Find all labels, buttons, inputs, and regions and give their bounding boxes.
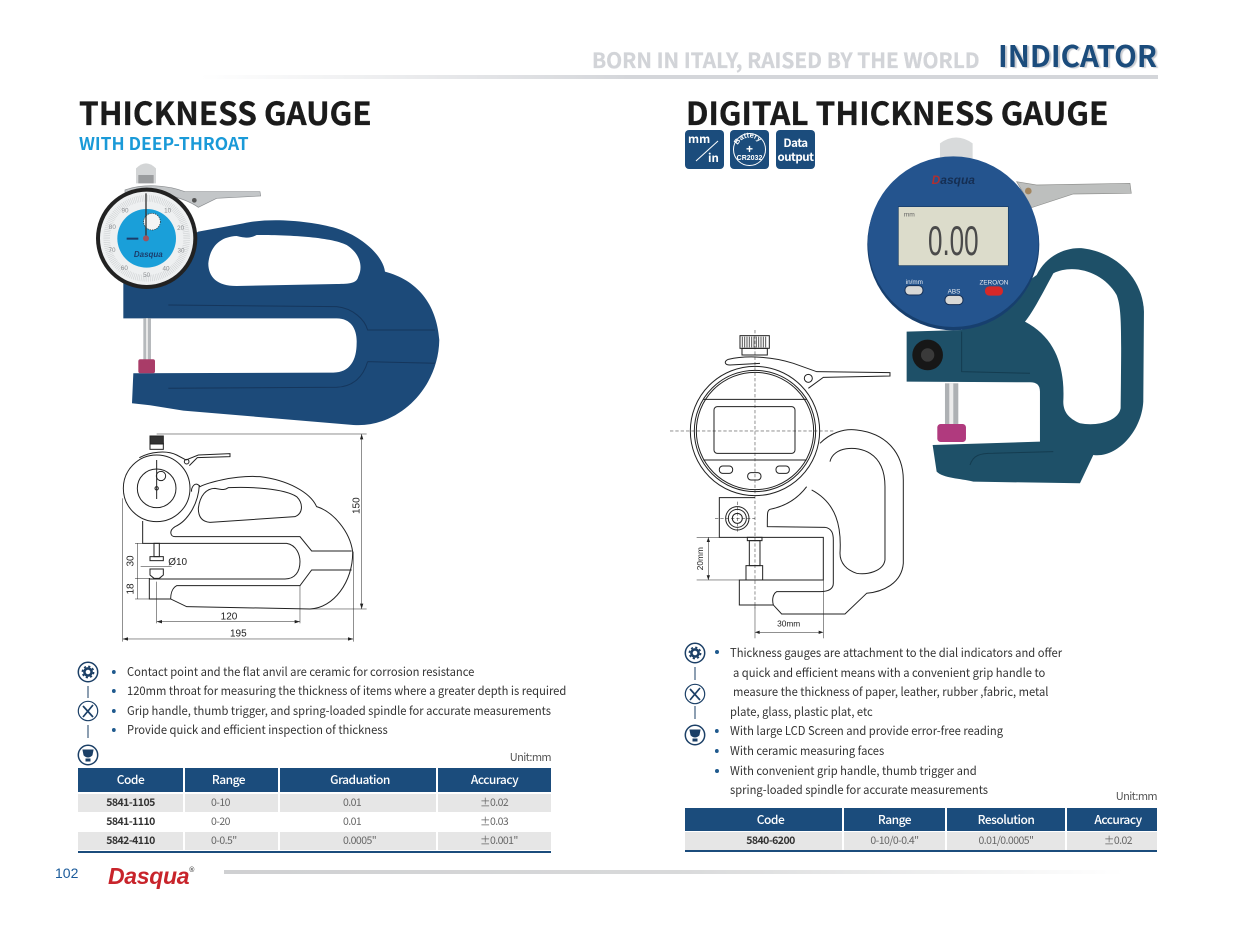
- dial: [96, 188, 197, 289]
- spec table: right: 0.01/0.0005": [979, 833, 1033, 848]
- spec table: left: [78, 768, 551, 853]
- brand logo: Dasqua®: [108, 863, 194, 889]
- spec table: right: Resolution: [978, 811, 1034, 828]
- page number: 102: [55, 865, 78, 881]
- thumb lever: [125, 186, 261, 207]
- dimension labels: 20mm: [695, 547, 705, 570]
- brand: Dasqua: [932, 173, 975, 187]
- spec table: left: 0.0005": [343, 833, 376, 848]
- dimension labels: 18: [126, 583, 137, 595]
- photo: dial deep-throat thickness gauge: 60: [121, 265, 128, 272]
- spec table: left: Accuracy: [471, 771, 518, 788]
- spec table: left: ±0.02: [480, 795, 508, 810]
- spindle: [143, 318, 151, 360]
- thumb lever: [1017, 182, 1131, 208]
- dial brand: Dasqua: [134, 250, 163, 259]
- icon: gear: [78, 662, 98, 682]
- bullet 2: With large LCD Screen and provide error-free reading: [730, 722, 1003, 739]
- spec table: left: 0-0.5": [211, 833, 237, 848]
- subtitle: with deep-throat: WITH DEEP-THROAT: [79, 131, 249, 156]
- icon: tools: [685, 684, 705, 704]
- row 5842-4110: 5842-4110: [106, 833, 155, 848]
- bullet 1: Contact point and the flat anvil are ceramic for corrosion resistance: [127, 663, 474, 680]
- badge: data output: [776, 130, 815, 169]
- header slogan: BORN IN ITALY, RAISED BY THE WORLD: [592, 44, 980, 74]
- row 5841-1105: 5841-1105: [106, 795, 155, 810]
- photo: dial deep-throat thickness gauge: 30: [177, 248, 185, 255]
- photo: dial deep-throat thickness gauge: 80: [109, 224, 116, 231]
- dial buttons: [905, 286, 923, 295]
- bullet 4: Provide quick and efficient inspection of thickness: [127, 721, 388, 738]
- ceramic tip: [138, 359, 155, 373]
- spec table: left: Graduation: [330, 771, 390, 788]
- badge: mm/in: [685, 130, 724, 169]
- dial body: [867, 158, 1039, 330]
- bullet 1: Thickness gauges are attachment to the dial indicators and offer: [730, 644, 1062, 661]
- row 5840-6200: 5840-6200: [746, 833, 795, 848]
- spec table: right: 0-10/0-0.4": [870, 833, 919, 848]
- dimension labels: 30mm: [777, 619, 800, 629]
- photo: dial deep-throat thickness gauge: 10: [164, 207, 172, 214]
- row 5840-6200: [685, 832, 842, 850]
- footer rule: [224, 870, 1124, 874]
- badge: mm/in: in: [708, 150, 719, 166]
- clamp screw: [912, 340, 943, 370]
- badge: battery CR2032: Battery: [734, 132, 762, 145]
- icon: gear: [685, 643, 705, 663]
- icon column: right: [684, 642, 706, 746]
- photo: dial deep-throat thickness gauge: 40: [162, 266, 170, 273]
- header rule: [200, 75, 1158, 79]
- row 5842-4110: [78, 832, 183, 850]
- photo: digital thickness gauge: ZERO/ON: [980, 279, 1009, 286]
- photo: dial deep-throat thickness gauge: 90: [121, 207, 129, 214]
- unit label: right: Unit:mm: [1116, 788, 1157, 804]
- icon column: left: [78, 662, 98, 766]
- dimension labels: [695, 547, 800, 629]
- dimension labels: 30: [126, 555, 137, 567]
- badge: data output: output: [778, 149, 813, 165]
- photo: digital thickness gauge: ABS: [948, 288, 960, 295]
- bullet 2: 120mm throat for measuring the thickness of items where a greater depth is required: [127, 682, 566, 699]
- gauge frame: [907, 248, 1144, 483]
- spec table: right: [685, 808, 1157, 852]
- bullet 4: With convenient grip handle, thumb trigger and: [730, 762, 977, 779]
- header row: [78, 768, 183, 792]
- dimension labels: 150: [351, 497, 362, 514]
- top knob: [940, 137, 973, 158]
- photo: dial deep-throat thickness gauge: 50: [143, 272, 151, 279]
- spec table: left: 0-10: [211, 795, 230, 810]
- spec table: left: 0.01: [343, 795, 361, 810]
- bullet 1: [715, 644, 1062, 720]
- top knob: [136, 163, 156, 183]
- icon: tools: [78, 701, 98, 721]
- title: thickness gauge: THICKNESS GAUGE: [79, 89, 372, 135]
- dimension labels: 120: [221, 612, 238, 623]
- badge: mm/in: mm: [688, 131, 710, 147]
- row 5841-1110: 5841-1110: [106, 814, 155, 829]
- outline: [123, 455, 190, 522]
- photo: dial deep-throat thickness gauge: 70: [108, 247, 116, 254]
- badge: battery CR2032: CR2032: [737, 155, 762, 162]
- dimension labels: 195: [230, 628, 247, 639]
- spec table: right: Range: [878, 811, 911, 828]
- spindle: [945, 383, 958, 424]
- spec table: right: ±0.02: [1104, 833, 1132, 848]
- ceramic tip: [937, 424, 966, 442]
- bullet 1: measure the thickness of paper, leather, rubber ,fabric, metal: [733, 683, 1048, 700]
- feature badges: [685, 130, 815, 169]
- header row: Code: [117, 771, 144, 788]
- badge: data output: Data: [783, 135, 808, 151]
- header row: Code: [757, 811, 784, 828]
- badge: battery CR2032: +: [746, 142, 753, 156]
- spec table: left: 0-20: [211, 814, 230, 829]
- dimension labels: [126, 497, 362, 639]
- spec table: left: ±0.001": [480, 833, 518, 848]
- spec table: left: 0.01: [343, 814, 361, 829]
- bullet 3: Grip handle, thumb trigger, and spring-loaded spindle for accurate measurements: [127, 702, 551, 719]
- bullet 4: [715, 762, 988, 798]
- unit label: left: Unit:mm: [510, 749, 551, 765]
- lcd screen: [898, 207, 1008, 266]
- row 5841-1105: [78, 794, 183, 812]
- feature list: left: [112, 663, 566, 738]
- photo: digital thickness gauge: 0.00: [928, 218, 979, 264]
- bullet 1: a quick and efficient means with a convenient grip handle to: [733, 664, 1045, 681]
- spec table: left: Range: [212, 771, 245, 788]
- icon: trophy: [78, 745, 98, 765]
- outline: [690, 366, 820, 496]
- bullet 1: plate, glass, plastic plat, etc: [730, 703, 873, 720]
- bullet 4: spring-loaded spindle for accurate measurements: [730, 781, 988, 798]
- badge: battery CR2032: [730, 130, 769, 169]
- bullet 3: With ceramic measuring faces: [730, 742, 884, 759]
- spec table: right: Accuracy: [1094, 811, 1142, 828]
- gauge frame: [123, 220, 439, 425]
- dimension labels: Ø10: [168, 557, 188, 568]
- photo: digital thickness gauge: mm: [904, 212, 915, 219]
- spec table: left: ±0.03: [480, 814, 508, 829]
- feature list: right: [714, 644, 1062, 798]
- photo: digital thickness gauge: in/mm: [906, 279, 923, 286]
- header category: indicator: INDICATOR: [998, 34, 1157, 76]
- icon: trophy: [685, 725, 705, 745]
- photo: dial deep-throat thickness gauge: 20: [177, 225, 185, 232]
- header row: [685, 808, 842, 831]
- title: digital thickness gauge: DIGITAL THICKNESS GAUGE: [686, 89, 1108, 135]
